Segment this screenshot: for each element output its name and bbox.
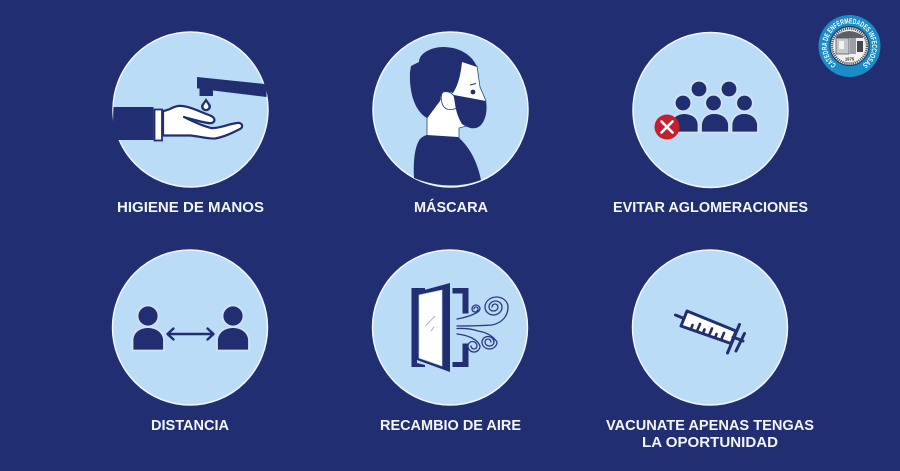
label: vacunate: VACUNATE APENAS TENGAS xyxy=(606,418,814,434)
label: distancia: DISTANCIA xyxy=(151,418,230,434)
arrow: two-way distance xyxy=(168,328,214,340)
icon: faucet xyxy=(197,77,267,97)
panel: evitar aglomeraciones xyxy=(633,32,788,188)
icon: sleeve xyxy=(113,107,154,140)
icon: ear xyxy=(441,92,457,110)
icon: cuff xyxy=(154,110,162,140)
icon circle: crowd xyxy=(633,32,788,188)
icon: hair xyxy=(410,47,477,118)
icon: mask xyxy=(454,95,487,128)
panel: higiene de manos xyxy=(113,32,268,187)
icon: hand xyxy=(163,106,242,139)
panel: mascara xyxy=(373,32,528,187)
icon: right person xyxy=(217,306,249,350)
icon circle: hands xyxy=(113,32,268,187)
icon: left person xyxy=(132,306,164,350)
label: higiene de manos: HIGIENE DE MANOS xyxy=(117,200,264,216)
logo: catedra de enfermedades infecciosas: CATEDRA DE ENFERMEDADES INFECCIOSAS xyxy=(822,18,878,68)
icon circle: mask xyxy=(373,32,528,187)
icon: window frame xyxy=(412,288,468,367)
icon: open window xyxy=(417,283,450,372)
icon: eye xyxy=(471,90,475,94)
label: recambio de aire: RECAMBIO DE AIRE xyxy=(380,418,521,434)
icon circle: syringe xyxy=(632,250,788,405)
logo: seal engraving: 1975 xyxy=(845,56,855,62)
icon: air swirls xyxy=(457,297,508,352)
icon circle: window xyxy=(372,250,528,405)
icon circle: distance xyxy=(112,250,268,405)
icon: crowd of people xyxy=(672,81,758,132)
label: evitar aglomeraciones: EVITAR AGLOMERACIONES xyxy=(613,200,808,216)
icon: water drop xyxy=(201,98,211,111)
icon: syringe xyxy=(676,311,744,353)
icon: neck and face xyxy=(427,61,486,138)
icon: red cross badge xyxy=(654,114,680,140)
label: mascara: MÁSCARA xyxy=(414,199,489,216)
panel: distancia xyxy=(112,250,268,405)
panel: recambio de aire xyxy=(372,250,528,405)
panel: vacunate xyxy=(632,250,788,405)
label: vacunate: LA OPORTUNIDAD xyxy=(642,435,778,451)
label: vacunate xyxy=(606,418,814,451)
icon: shoulders xyxy=(414,135,481,185)
logo: ring text xyxy=(827,23,872,64)
